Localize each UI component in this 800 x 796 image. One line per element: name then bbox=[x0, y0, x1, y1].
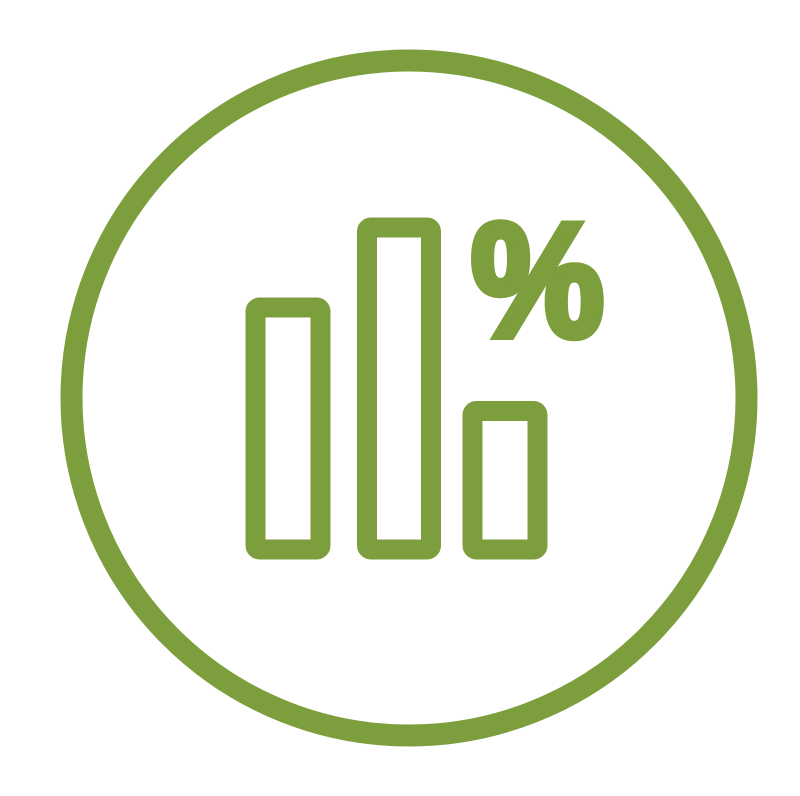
percent sign: % bbox=[471, 190, 604, 371]
circle outline bbox=[72, 60, 746, 736]
left bar bbox=[256, 308, 320, 550]
right bar bbox=[472, 411, 538, 550]
middle bar bbox=[367, 228, 431, 550]
